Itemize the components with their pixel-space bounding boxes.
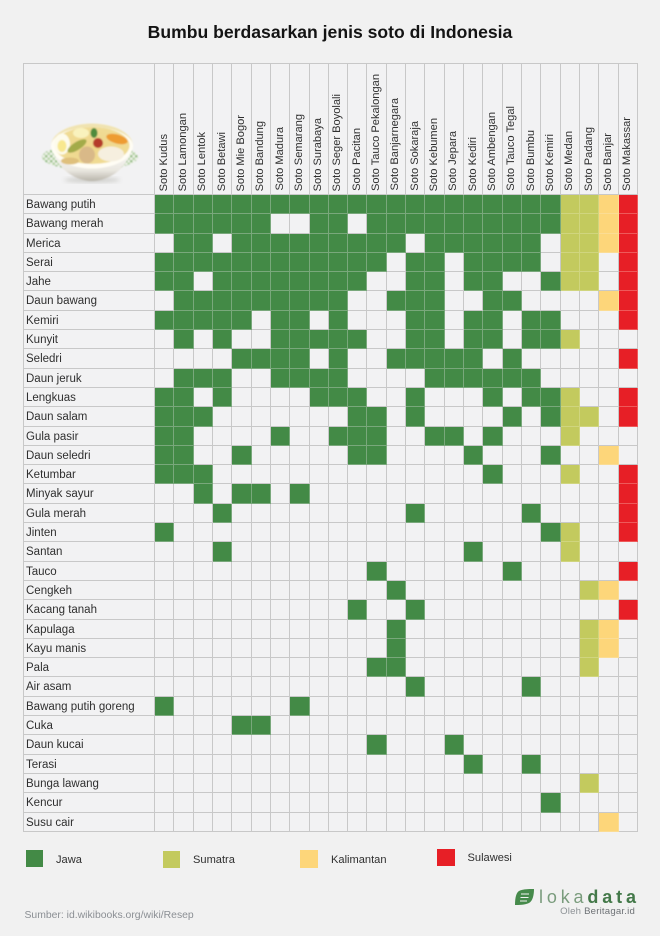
row: Jahe — [24, 272, 638, 291]
row: Kunyit: Kunyit — [26, 334, 58, 346]
source note: Sumber: id.wikibooks.org/wiki/Resep — [24, 910, 194, 921]
row: Kacang tanah — [24, 600, 638, 620]
row: Kemiri — [24, 311, 638, 330]
row: Bunga lawang: Bunga lawang — [26, 778, 99, 790]
row: Jinten: Jinten — [26, 527, 57, 539]
row: Bawang putih: Bawang putih — [26, 199, 96, 211]
legend: Sumatra — [162, 851, 180, 868]
row: Daun bawang: Daun bawang — [26, 295, 97, 307]
row: Tauco — [24, 562, 638, 581]
header row: soto names: Soto Makassar — [621, 117, 633, 191]
row: Kacang tanah: Kacang tanah — [26, 604, 97, 616]
header row: soto names: Soto Bandung — [254, 121, 266, 191]
row: Cuka: Cuka — [26, 720, 53, 732]
header row: soto names: Soto Lamongan — [177, 113, 189, 191]
header row: soto names: Soto Betawi — [216, 132, 228, 191]
row: Daun bawang — [24, 291, 638, 311]
row: Gula merah: Gula merah — [26, 508, 86, 520]
row: Santan — [24, 542, 638, 562]
row: Serai: Serai — [26, 257, 53, 269]
row: Daun kucai: Daun kucai — [26, 739, 84, 751]
row: Kunyit — [24, 330, 638, 349]
row: Kapulaga: Kapulaga — [26, 624, 75, 636]
row: Ketumbar — [24, 465, 638, 484]
row: Air asam — [24, 677, 638, 697]
row: Jahe: Jahe — [26, 276, 51, 288]
header row: soto names: Soto Kediri — [467, 137, 479, 191]
row: Ketumbar: Ketumbar — [26, 469, 76, 481]
legend: Jawa — [26, 850, 43, 867]
row: Seledri — [24, 349, 638, 369]
row: Daun salam — [24, 407, 638, 427]
row: Gula pasir: Gula pasir — [26, 431, 78, 443]
header row: soto names: Soto Surabaya — [312, 118, 324, 191]
header row: soto names: Soto Mie Bogor — [235, 115, 247, 191]
header row: soto names: Soto Medan — [563, 131, 575, 191]
row: Santan: Santan — [26, 546, 62, 558]
row: Susu cair — [24, 813, 638, 832]
header row: soto names: Soto Kebumen — [428, 118, 440, 191]
header row: soto names: Soto Ambengan — [486, 112, 498, 191]
header row: soto names — [24, 64, 638, 195]
legend label: Jawa: Jawa — [56, 854, 82, 866]
row: Tauco: Tauco — [26, 566, 57, 578]
row: Gula pasir — [24, 427, 638, 446]
row: Kencur: Kencur — [26, 797, 62, 809]
row: Terasi: Terasi — [26, 759, 57, 771]
row: Daun jeruk: Daun jeruk — [26, 373, 82, 385]
row: Susu cair: Susu cair — [26, 816, 74, 828]
row: Daun seledri — [24, 446, 638, 465]
header row: soto names: Soto Sokaraja — [409, 121, 421, 191]
header row: soto names: Soto Madura — [274, 127, 286, 191]
row: Cengkeh — [24, 581, 638, 600]
header row: soto names: Soto Seger Boyolali — [331, 94, 343, 191]
icon: soto bowl illustration — [42, 122, 138, 184]
row: Kencur — [24, 793, 638, 813]
row: Bawang merah: Bawang merah — [26, 218, 103, 230]
logo byline: Oleh Beritagar.id — [560, 906, 635, 917]
legend label: Sumatra: Sumatra — [193, 854, 235, 866]
legend: Kalimantan — [300, 850, 318, 868]
row: Daun salam: Daun salam — [26, 411, 87, 423]
header row: soto names: Soto Pacitan — [351, 128, 363, 191]
ingredient matrix table — [23, 63, 638, 832]
row: Kapulaga — [24, 620, 638, 639]
row: Pala — [24, 658, 638, 677]
header row: soto names: Soto Kemiri — [544, 134, 556, 191]
row: Seledri: Seledri — [26, 353, 62, 365]
header row: soto names: Soto Padang — [583, 127, 595, 191]
header row: soto names: Soto Tauco Tegal — [505, 106, 517, 191]
header row: soto names: Soto Semarang — [293, 114, 305, 191]
row: Bawang merah — [24, 214, 638, 234]
header row: soto names: Soto Banjar — [602, 133, 614, 191]
row: Kayu manis: Kayu manis — [26, 643, 86, 655]
row: Lengkuas — [24, 388, 638, 407]
legend: Sulawesi — [437, 848, 454, 866]
row: Terasi — [24, 755, 638, 774]
row: Minyak sayur: Minyak sayur — [26, 488, 94, 500]
row: Bawang putih goreng: Bawang putih goreng — [26, 701, 135, 713]
row: Merica — [24, 234, 638, 253]
header row: soto names: Soto Jepara — [447, 131, 459, 191]
row: Minyak sayur — [24, 484, 638, 504]
row: Cengkeh: Cengkeh — [26, 585, 72, 597]
row: Pala: Pala — [26, 662, 49, 674]
row: Lengkuas: Lengkuas — [26, 392, 76, 404]
row: Gula merah — [24, 504, 638, 523]
legend label: Kalimantan: Kalimantan — [331, 854, 387, 866]
row: Cuka — [24, 716, 638, 735]
header row: soto names: Soto Bumbu — [525, 130, 537, 191]
title: Bumbu berdasarkan jenis soto di Indonesia — [148, 22, 512, 42]
header row: soto names: Soto Tauco Pekalongan — [370, 74, 382, 191]
row: Kayu manis — [24, 639, 638, 658]
header row: soto names: Soto Kudus — [158, 134, 170, 191]
row: Daun seledri: Daun seledri — [26, 450, 91, 462]
row: Bawang putih — [24, 195, 638, 214]
row: Merica: Merica — [26, 238, 61, 250]
row: Air asam: Air asam — [26, 681, 71, 693]
row: Bawang putih goreng — [24, 697, 638, 716]
icon: lokadata leaf logo — [515, 889, 534, 905]
row: Daun jeruk — [24, 369, 638, 388]
row: Kemiri: Kemiri — [26, 315, 59, 327]
header row: soto names: Soto Lentok — [196, 132, 208, 191]
logo wordmark: lokadata: lokadata — [539, 887, 640, 907]
row: Jinten — [24, 523, 638, 542]
legend label: Sulawesi: Sulawesi — [468, 852, 512, 864]
row: Bunga lawang — [24, 774, 638, 793]
header row: soto names: Soto Banjarnegara — [389, 98, 401, 191]
row: Daun kucai — [24, 735, 638, 755]
row: Serai — [24, 253, 638, 272]
